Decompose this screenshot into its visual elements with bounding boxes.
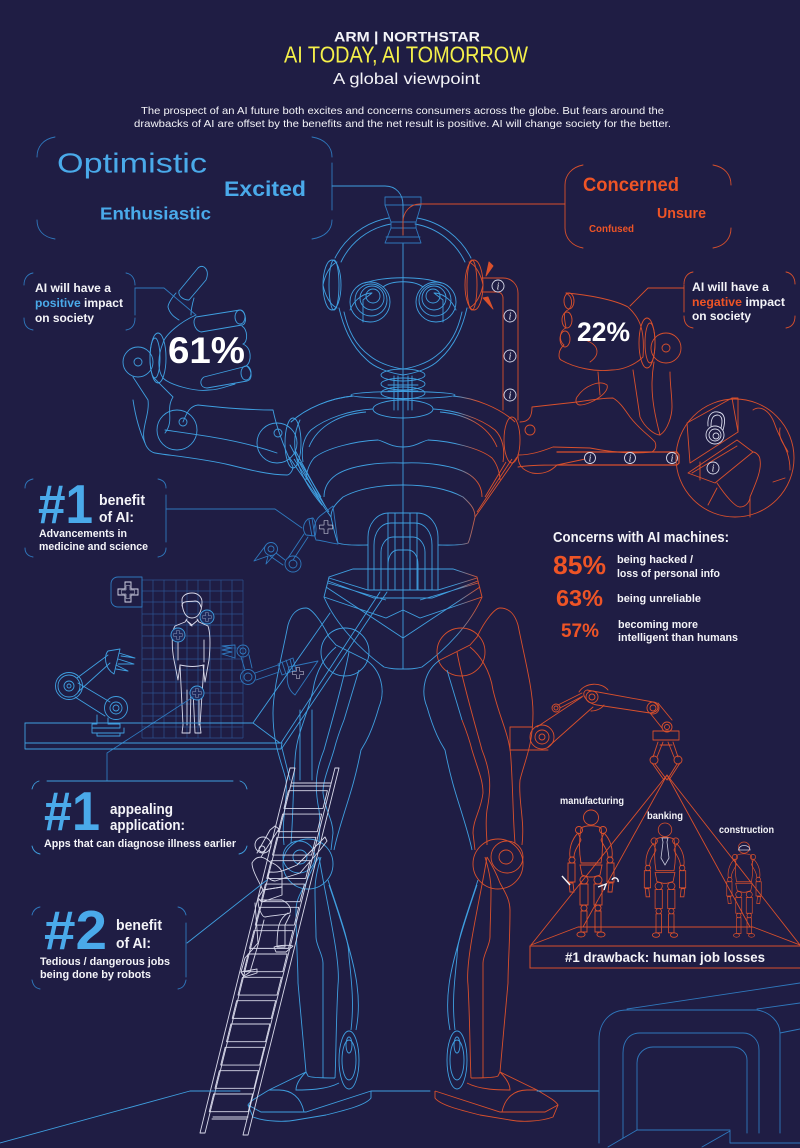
connector: negative impact	[630, 288, 684, 306]
stat: 63%: 63%	[556, 585, 603, 611]
info icon	[584, 452, 596, 464]
construction worker	[727, 842, 761, 937]
robot left arm	[133, 377, 325, 506]
neck coils	[351, 369, 455, 418]
callout: #1 benefit: #1	[38, 473, 93, 535]
info icon	[666, 452, 678, 464]
word: Unsure: Unsure	[657, 205, 706, 222]
callout: #1 appealing application: #1	[44, 780, 100, 842]
info icon: i	[671, 454, 674, 464]
callout: #2 benefit: Tedious / dangerous jobs	[40, 956, 170, 968]
callout: positive impact: on society	[35, 311, 94, 325]
panel: positive emotions	[37, 137, 332, 239]
label: more intelligent: becoming more	[618, 619, 698, 631]
callout: #2 benefit: of AI:	[116, 935, 151, 952]
callout: #1 benefit: Advancements in	[39, 528, 127, 540]
connector: negative emotions to antenna	[403, 204, 565, 235]
hacked laptop circle	[676, 398, 794, 517]
panel: negative emotions	[565, 165, 731, 248]
connector: #1 benefit	[166, 509, 302, 528]
subtitle: A global viewpoint	[333, 71, 481, 88]
label: more intelligent	[618, 619, 738, 644]
treatment node	[190, 686, 204, 700]
info icon: i	[509, 352, 512, 362]
callout: #1 appealing application: Apps that can diagnose illness earlier	[44, 838, 237, 850]
doorway at lower right	[599, 983, 800, 1147]
concerns heading: Concerns with AI machines:	[553, 529, 729, 546]
brand logo line: ARM | NORTHSTAR	[334, 28, 480, 44]
left surgical robot arm	[56, 649, 135, 736]
callout: #1 benefit: of AI:	[99, 509, 134, 526]
patient figure	[172, 593, 210, 733]
connector: positive impact	[135, 288, 196, 315]
callout: #2 benefit: benefit	[116, 917, 162, 934]
word: Excited: Excited	[224, 178, 306, 201]
info icon: i	[629, 454, 632, 464]
manufacturing worker	[562, 810, 618, 937]
lock icon	[706, 412, 725, 444]
stat: 57%: 57%	[561, 621, 599, 642]
stat: 61%: 61%	[168, 330, 245, 371]
label: unreliable: being unreliable	[617, 593, 701, 605]
info icon	[492, 280, 504, 292]
info icon	[624, 452, 636, 464]
label: more intelligent: intelligent than humans	[618, 632, 738, 644]
stat: 22%: 22%	[577, 317, 630, 347]
callout: #1 appealing application	[32, 780, 247, 854]
connector: #2 benefit to climbing robot	[187, 880, 267, 943]
climbing robot	[241, 826, 327, 977]
label: hacked	[617, 554, 720, 580]
callout: #2 benefit: being done by robots	[40, 969, 151, 981]
intro paragraph	[134, 105, 671, 130]
connector: positive emotions to antenna	[332, 186, 403, 235]
medical scan grid	[142, 580, 243, 738]
label: construction: construction	[719, 825, 774, 836]
callout: negative impact: AI will have a	[692, 280, 769, 294]
left eye	[350, 282, 390, 322]
robot left leg	[248, 608, 382, 1121]
callout: #1 appealing application: application:	[110, 817, 185, 834]
info icon: i	[589, 454, 592, 464]
factory floor lines	[0, 1091, 599, 1143]
callout: negative impact: on society	[692, 309, 751, 323]
callout: #2 benefit	[32, 899, 186, 989]
robot arm tool: medical plus	[254, 506, 338, 572]
word: Enthusiastic: Enthusiastic	[100, 204, 211, 224]
left hand	[123, 266, 251, 390]
robot right ear	[465, 260, 493, 310]
info icon: i	[497, 282, 500, 292]
callout: negative impact	[684, 272, 795, 328]
callout: #2 benefit: #2	[44, 899, 107, 961]
callout: #1 benefit: medicine and science	[39, 541, 148, 553]
callout: #1 appealing application: appealing	[110, 801, 173, 818]
info icon	[707, 462, 719, 474]
word: Concerned: Concerned	[583, 175, 679, 196]
treatment node	[200, 610, 214, 624]
intro paragraph: The prospect of an AI future both excites and concerns consumers across the globe. But fears around the	[141, 105, 664, 117]
right surgical robot arm	[222, 645, 318, 695]
robot torso and belly	[289, 243, 517, 669]
drawback banner: #1 drawback: human job losses	[565, 949, 765, 965]
callout: negative impact: negative impact	[692, 295, 785, 309]
job-loss projection beam	[531, 775, 800, 945]
right eye	[416, 282, 456, 322]
medical icon box	[111, 577, 142, 607]
robot head	[323, 218, 471, 375]
info icon	[504, 350, 516, 362]
operating table	[25, 592, 387, 780]
callout: #1 benefit: benefit	[99, 492, 145, 509]
drawback banner	[530, 946, 800, 968]
info icon	[504, 389, 516, 402]
callout: positive impact: AI will have a	[35, 281, 111, 295]
treatment node	[171, 628, 185, 642]
panel: concerns with AI machines	[553, 529, 738, 644]
left ear	[323, 260, 341, 310]
ladder	[200, 768, 339, 1135]
callout: #1 benefit	[25, 473, 166, 557]
info icon	[504, 310, 516, 322]
callout: positive impact	[24, 273, 135, 330]
robot right leg	[424, 608, 558, 1121]
right arm	[504, 362, 672, 473]
intro paragraph: drawbacks of AI are offset by the benefits and the net result is positive. AI will change society for the better.	[134, 118, 671, 130]
connector: treatment to appealing application	[107, 697, 193, 781]
label: hacked: being hacked /	[617, 554, 693, 566]
label: hacked: loss of personal info	[617, 568, 720, 580]
info icon: i	[712, 464, 715, 474]
stat: 85%: 85%	[553, 550, 606, 580]
word: Confused: Confused	[589, 224, 634, 235]
head antenna	[385, 197, 421, 243]
banking worker	[644, 823, 686, 937]
data pipes with i markers	[482, 278, 679, 465]
factory robot arm	[510, 684, 682, 780]
info icon: i	[509, 390, 512, 402]
right hand	[559, 293, 681, 371]
label: manufacturing: manufacturing	[560, 796, 624, 807]
callout: positive impact: positive impact	[35, 296, 123, 310]
title: AI TODAY, AI TOMORROW	[284, 42, 528, 68]
label: banking: banking	[647, 811, 683, 822]
info icon: i	[509, 312, 512, 322]
word: Optimistic: Optimistic	[57, 148, 207, 178]
